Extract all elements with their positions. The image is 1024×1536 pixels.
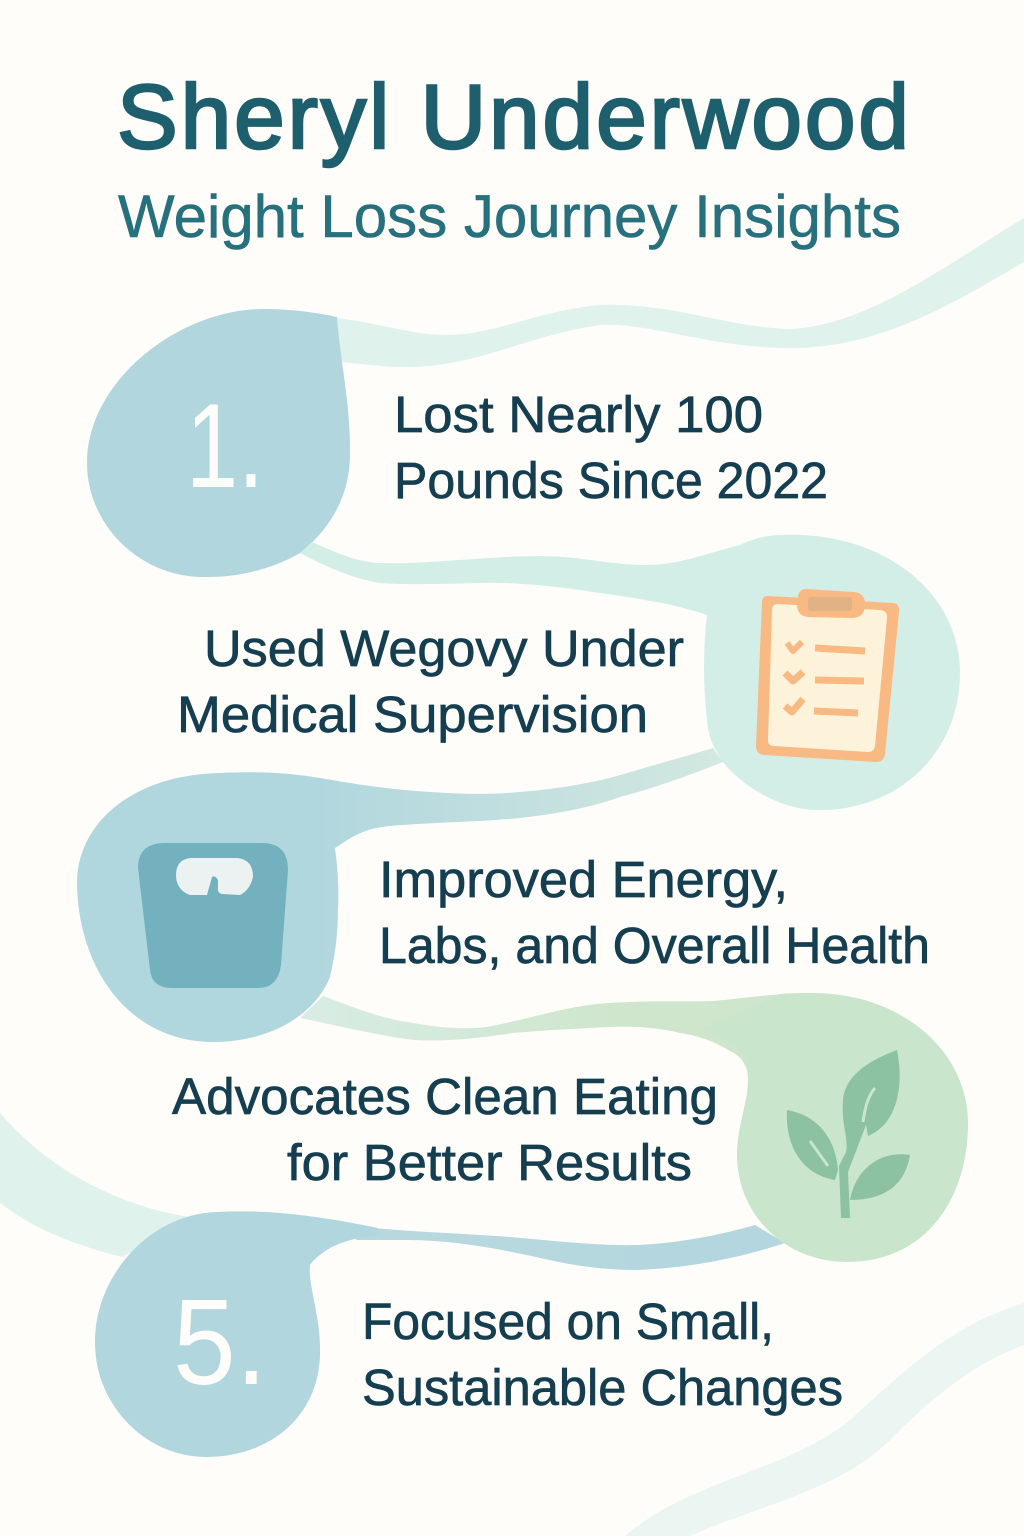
- step 5 number: 5.: [173, 1274, 267, 1410]
- text: step 2: Used Wegovy Under: [204, 620, 684, 677]
- ribbon: left lower wave: [0, 1113, 195, 1257]
- ribbon: step 4 to step 5: [350, 1225, 785, 1270]
- icon: clipboard: [756, 589, 899, 762]
- title: Sheryl Underwood: [117, 67, 909, 168]
- subtitle: Weight Loss Journey Insights: [118, 183, 901, 250]
- text: step 1: Lost Nearly 100: [394, 386, 763, 443]
- step 1 number: 1.: [186, 379, 264, 513]
- text: step 3: Labs, and Overall Health: [379, 917, 930, 974]
- text: step 5: Focused on Small,: [362, 1293, 774, 1350]
- text: step 3: [379, 851, 930, 974]
- panel: step 3 scale badge with ribbon from step 2: [77, 748, 723, 1042]
- panel: step 5 number badge: [95, 1211, 380, 1457]
- text: step 1: [394, 386, 828, 509]
- ribbon: bottom right wave: [625, 1303, 1024, 1536]
- text: step 2: [177, 620, 684, 743]
- text: step 3: Improved Energy,: [379, 851, 788, 908]
- icon: bathroom scale: [138, 843, 288, 988]
- panel: step 2 clipboard badge with ribbon from step 1: [300, 535, 960, 810]
- text: step 4: [172, 1068, 718, 1191]
- text: step 5: [362, 1293, 843, 1416]
- text: step 4: Advocates Clean Eating: [172, 1068, 718, 1125]
- text: step 1: Pounds Since 2022: [394, 452, 828, 509]
- panel: step 4 plant badge: [700, 993, 968, 1262]
- ribbon: top right wave: [336, 218, 1024, 367]
- panel: step 1 number badge: [87, 309, 350, 577]
- ribbon: step 3 to step 4: [300, 994, 790, 1075]
- icon: plant sprout: [787, 1050, 910, 1218]
- text: step 4: for Better Results: [287, 1134, 692, 1191]
- text: step 5: Sustainable Changes: [362, 1359, 843, 1416]
- text: step 2: Medical Supervision: [177, 686, 648, 743]
